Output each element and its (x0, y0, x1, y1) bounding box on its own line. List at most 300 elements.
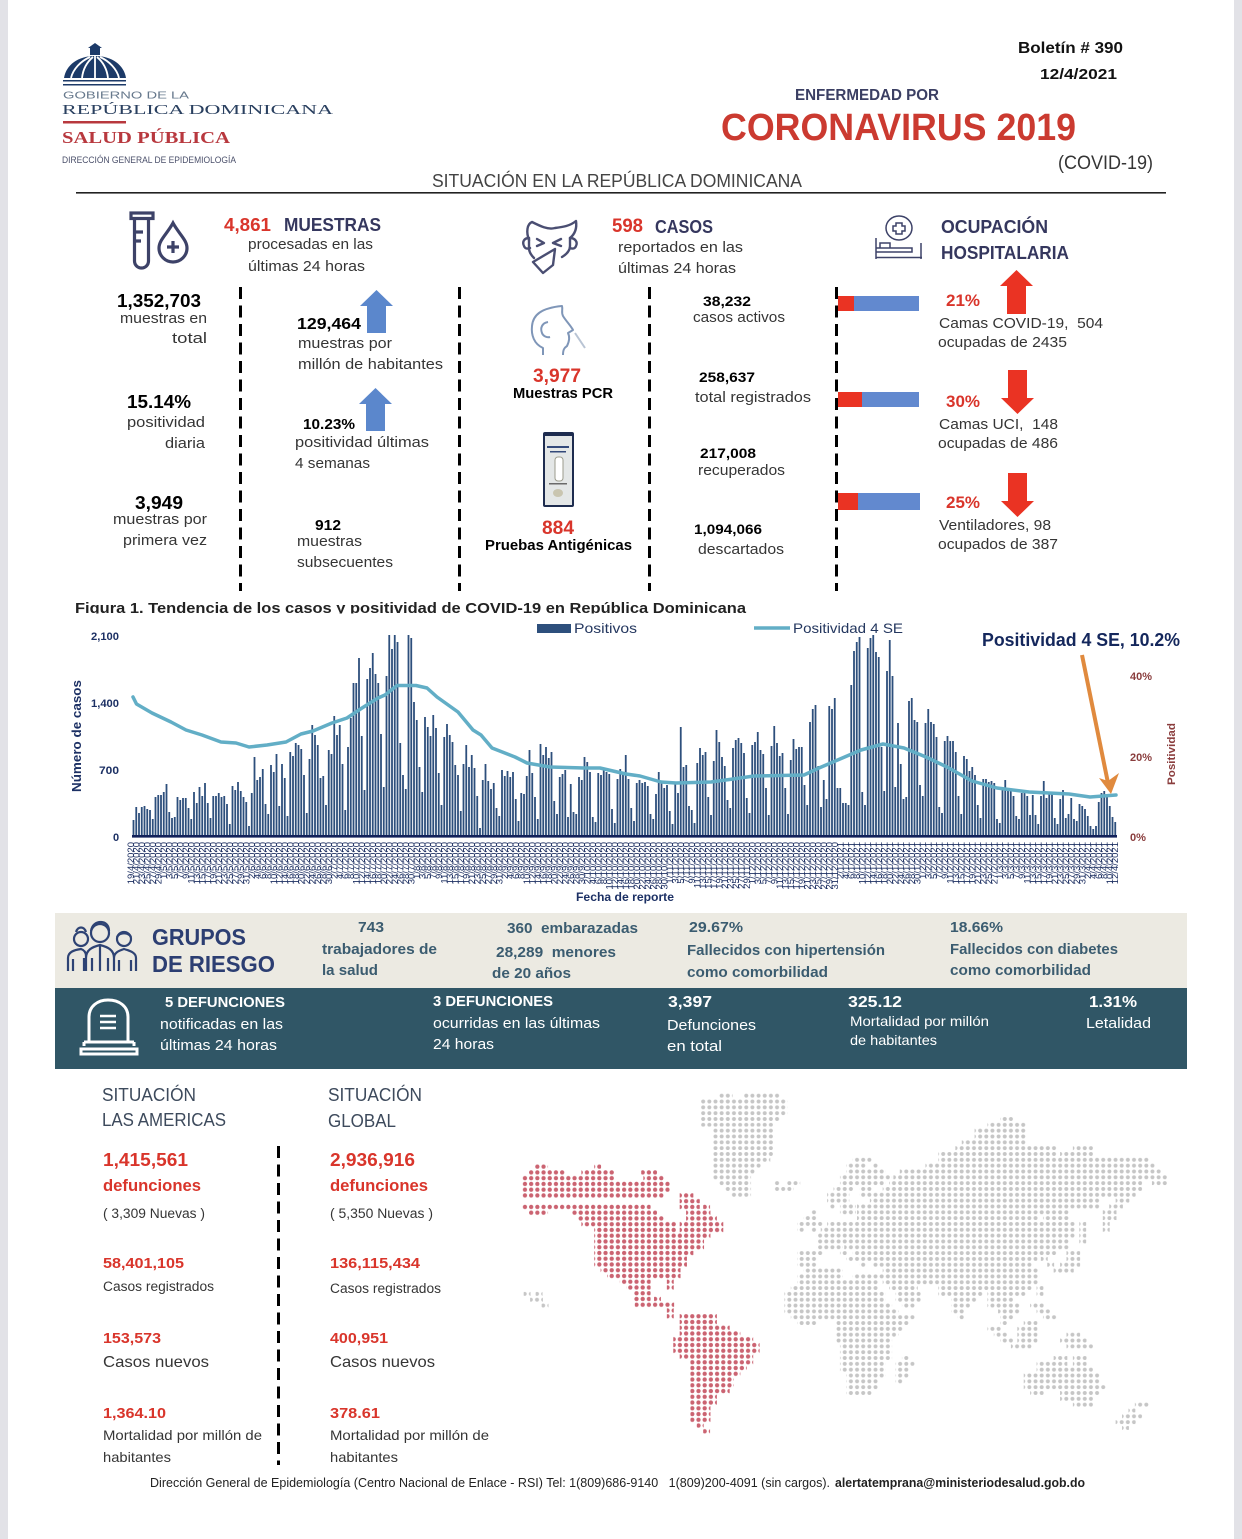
date axis labels: 9/11/2020 (687, 842, 698, 884)
date axis labels: 17/2/2021 (962, 842, 973, 884)
date axis labels: 11/11/2020 (692, 842, 704, 888)
panel: muestras: muestras en (120, 310, 207, 327)
panel: totales de casos: 258,637 (699, 369, 755, 385)
date axis labels: 5/12/2020 (758, 842, 770, 884)
date axis labels: 6/6/2020 (258, 842, 269, 879)
date axis labels: 22/6/2020 (302, 842, 313, 884)
panel: totales de casos: casos activos (693, 309, 785, 326)
text: embarazadas y menores: de 20 años (492, 965, 571, 982)
text: mortalidad por millón (848, 994, 989, 1048)
panel: muestras por millón y positividad: 129,464 (297, 316, 361, 333)
date axis labels: 9/2/2021 (940, 842, 951, 879)
date axis labels: 11/8/2020 (440, 842, 450, 884)
panel: situación global: SITUACIÓN (328, 1084, 422, 1105)
panel: situación global: defunciones (330, 1176, 428, 1195)
chart: camas COVID-19: ocupadas de 2435 (938, 334, 1067, 351)
date axis labels: 9/12/2020 (770, 842, 780, 884)
text: 5 defunciones: últimas 24 horas (160, 1037, 277, 1054)
date axis labels: 2/6/2020 (247, 842, 258, 879)
axis baseline (132, 835, 1117, 838)
date axis labels: 27/11/2020 (736, 842, 748, 889)
panel: muestras: primera vez (123, 532, 207, 549)
panel: situación global: ( 5,350 Nuevas ) (330, 1206, 433, 1221)
date axis labels: 25/11/2020 (731, 842, 742, 889)
date axis labels: 18/1/2021 (880, 842, 890, 884)
icon: hospital bed (876, 216, 922, 259)
panel: muestras: 4,861 (224, 215, 271, 235)
date axis labels: 27/3/2021 (1066, 842, 1078, 884)
date axis labels: 27/2/2021 (990, 842, 1000, 884)
chart: camas UCI: 30% (946, 392, 980, 411)
date axis labels: 17/5/2020 (203, 842, 214, 884)
date axis labels: 28/6/2020 (318, 842, 330, 884)
date axis labels: 13/2/2021 (951, 842, 962, 884)
date axis labels: 13/8/2020 (445, 842, 456, 884)
panel: totales de casos: recuperados (698, 462, 785, 479)
map: the Americas (525, 1167, 756, 1431)
date axis labels: 25/2/2021 (984, 842, 995, 884)
date axis labels: 31/5/2020 (242, 842, 252, 884)
text: defunciones en total (667, 994, 756, 1055)
date axis labels: 10/9/2020 (522, 842, 533, 884)
callout: positividad 4 SE, 10.2%: Positividad 4 SE, 10.2% (982, 630, 1180, 650)
panel: ocupación hospitalaria heading (941, 216, 1069, 263)
date axis labels: 6/4/2021 (1094, 842, 1105, 879)
date axis labels: 8/1/2021 (852, 842, 863, 879)
date axis labels: 2/7/2020 (330, 842, 340, 879)
date axis labels: 24/7/2020 (390, 842, 401, 884)
left axis labels: Número de casos (70, 680, 84, 792)
date axis labels: 18/7/2020 (374, 842, 384, 884)
date axis labels: 7/2/2021 (934, 842, 946, 879)
date axis labels: 5/8/2020 (423, 842, 434, 879)
date axis labels: 24/10/2020 (643, 842, 654, 890)
date axis labels: 29/3/2021 (1072, 842, 1083, 884)
date axis labels: 15/5/2020 (198, 842, 208, 884)
panel: muestras: diaria (165, 435, 206, 452)
date axis labels: 1/2/2021 (918, 842, 929, 879)
date axis labels: 3/11/2020 (670, 842, 682, 884)
date axis labels: 3/3/2021 (1000, 842, 1012, 879)
panel: situación las Américas: SITUACIÓN (102, 1084, 196, 1105)
date axis labels: 9/5/2020 (181, 842, 192, 879)
left axis labels (70, 631, 119, 844)
date axis labels: 21/11/2020 (720, 842, 731, 889)
text: hipertensión (687, 919, 885, 981)
date axis labels: 6/1/2021 (846, 842, 858, 879)
date axis labels: 17/8/2020 (456, 842, 467, 884)
figure title: Figura 1. Tendencia de los casos y positividad de COVID-19 en República Dominicana (75, 600, 747, 617)
line: positividad 4 SE (133, 686, 1116, 797)
date axis labels: 2/1/2021 (836, 842, 846, 879)
date axis labels: 30/10/2020 (660, 842, 670, 890)
text: trabajadores de la salud: 743 (358, 919, 384, 936)
date axis labels: 29/12/2020 (824, 842, 836, 890)
date axis labels: 19/12/2020 (797, 842, 808, 890)
date axis labels: 14/10/2020 (616, 842, 626, 890)
x axis title: Fecha de reporte (576, 890, 674, 904)
panel: grupos de riesgo: GRUPOS (152, 924, 246, 950)
text: trabajadores de la salud: la salud (322, 962, 378, 979)
date axis labels: 23/11/2020 (726, 842, 736, 889)
date axis labels: 21/12/2020 (802, 842, 814, 890)
logo: Gobierno de la República Dominicana (62, 43, 334, 166)
date axis labels: 21/3/2021 (1050, 842, 1061, 884)
text: trabajadores de la salud: trabajadores de (322, 941, 437, 958)
date axis labels: 1/3/2021 (995, 842, 1006, 879)
panel: situación las Américas: 58,401,105 (103, 1255, 184, 1272)
date axis labels: 23/3/2021 (1056, 842, 1066, 884)
date axis labels: 21/8/2020 (467, 842, 478, 884)
chart: camas COVID-19: Camas COVID-19, 504 (939, 315, 1103, 332)
panel: situación las Américas: 153,573 (103, 1330, 161, 1347)
panel: situación las Américas: habitantes (103, 1449, 171, 1465)
date axis labels: 4/7/2020 (335, 842, 346, 879)
date axis labels: 12/9/2020 (528, 842, 538, 884)
icon: nasal swab (532, 306, 585, 355)
date axis labels: 16/6/2020 (286, 842, 296, 884)
date axis labels: 13/3/2021 (1028, 842, 1039, 884)
date axis labels: 22/1/2021 (890, 842, 902, 884)
chart: ventiladores: 25% (946, 493, 980, 512)
date axis labels: 25/4/2020 (142, 842, 154, 884)
panel: situación global: Mortalidad por millón de (330, 1427, 489, 1443)
date axis labels: 4/10/2020 (588, 842, 599, 884)
chart: camas UCI (838, 370, 1058, 452)
date axis labels: 23/8/2020 (472, 842, 484, 884)
date axis labels: 20/6/2020 (296, 842, 308, 884)
date axis labels: 5/3/2021 (1006, 842, 1017, 879)
date axis labels: 9/8/2020 (434, 842, 445, 879)
panel: situación las Américas: LAS AMERICAS (102, 1110, 226, 1130)
date axis labels: 14/1/2021 (868, 842, 880, 884)
date axis labels: 1/12/2020 (748, 842, 758, 884)
text: 3 defunciones: ocurridas en las últimas (433, 1015, 600, 1032)
panel: pruebas antigénicas: 884 (542, 518, 574, 539)
date axis labels: 23/2/2021 (978, 842, 990, 884)
panel: muestras: 15.14% (127, 392, 191, 412)
bulletin number and date (1018, 40, 1123, 83)
left axis labels: 700 (99, 765, 119, 777)
date axis labels: 7/11/2020 (682, 842, 692, 884)
date axis labels: 11/3/2021 (1022, 842, 1034, 884)
legend: Positividad 4 SE (793, 620, 903, 636)
logo: Gobierno de la República Dominicana: SALUD PÚBLICA (62, 128, 231, 147)
date axis labels: 27/4/2020 (148, 842, 159, 884)
date axis labels: 8/4/2021 (1100, 842, 1110, 879)
text: defunciones en total: Defunciones (667, 1017, 756, 1034)
panel: ocupación hospitalaria heading: HOSPITALARIA (941, 243, 1069, 263)
chart: camas COVID-19: 21% (946, 291, 980, 310)
date axis labels: 11/5/2020 (186, 842, 198, 884)
text: defunciones en total: en total (667, 1038, 722, 1055)
date axis labels: 19/8/2020 (462, 842, 472, 884)
panel: muestras (113, 215, 381, 549)
icon: people (68, 922, 136, 971)
date axis labels: 18/6/2020 (291, 842, 302, 884)
date axis labels: 6/7/2020 (340, 842, 352, 879)
date axis labels: 15/8/2020 (450, 842, 462, 884)
date axis labels: 2/10/2020 (582, 842, 594, 884)
left axis labels: 1,400 (91, 698, 119, 710)
text: diabetes (950, 919, 1118, 979)
date axis labels: 12/6/2020 (274, 842, 286, 884)
date axis labels: 22/9/2020 (555, 842, 566, 884)
date axis labels: 23/5/2020 (220, 842, 230, 884)
date axis labels: 30/7/2020 (406, 842, 418, 884)
date axis labels: 29/5/2020 (236, 842, 247, 884)
bars: positivos (134, 635, 1115, 835)
date axis labels: 27/5/2020 (230, 842, 242, 884)
map: rest of the world (527, 1096, 1164, 1428)
date axis labels: 29/4/2020 (154, 842, 164, 884)
date axis labels: 8/9/2020 (516, 842, 528, 879)
icon: face with mask (523, 221, 577, 273)
logo: Gobierno de la República Dominicana: GOBIERNO DE LA (63, 90, 189, 102)
panel: casos: reportados en las (618, 239, 743, 256)
date axis labels: 21/4/2020 (132, 842, 142, 884)
date axis labels: 11/12/2020 (775, 842, 786, 889)
date axis labels: 5/2/2021 (929, 842, 940, 879)
panel: casos: CASOS (655, 217, 713, 237)
footer: alertatemprana@ministeriodesalud.gob.do (835, 1476, 1085, 1490)
panel: muestras: últimas 24 horas (248, 258, 365, 275)
right axis labels (1130, 671, 1178, 844)
date axis labels: 8/7/2020 (346, 842, 357, 879)
date axis labels: 3/5/2020 (164, 842, 176, 879)
panel: muestras PCR: 3,977 (533, 366, 581, 387)
panel: situación global: 136,115,434 (330, 1255, 421, 1272)
chart: ventiladores: Ventiladores, 98 (939, 517, 1051, 534)
date axis labels: 22/10/2020 (638, 842, 648, 890)
text: mortalidad por millón: de habitantes (850, 1032, 937, 1048)
panel: ocupación hospitalaria heading: OCUPACIÓN (941, 216, 1048, 237)
logo: Gobierno de la República Dominicana: DIRECCIÓN GENERAL DE EPIDEMIOLOGÍA (62, 155, 237, 166)
date axis labels: 20/1/2021 (885, 842, 896, 884)
panel: muestras por millón y positividad: muestras (297, 533, 362, 550)
text: diabetes: 18.66% (950, 919, 1003, 936)
date axis labels: 17/11/2020 (709, 842, 720, 889)
date axis labels: 1/8/2020 (412, 842, 423, 879)
date axis labels: 15/11/2020 (704, 842, 714, 889)
date axis labels: 28/7/2020 (401, 842, 412, 884)
date axis labels: 16/7/2020 (368, 842, 379, 884)
text: diabetes: como comorbilidad (950, 962, 1091, 979)
text: 3 defunciones (433, 993, 600, 1053)
date axis labels: 4/6/2020 (252, 842, 264, 879)
date axis labels: 27/12/2020 (819, 842, 830, 890)
date axis labels: 19/5/2020 (208, 842, 220, 884)
date axis labels: 5/11/2020 (676, 842, 687, 884)
panel: defunciones (55, 988, 1187, 1069)
date axis labels: 21/2/2021 (973, 842, 984, 884)
date axis labels: 31/12/2020 (830, 842, 841, 890)
date axis labels: 23/12/2020 (808, 842, 819, 890)
date axis labels: 3/8/2020 (418, 842, 428, 879)
text: 5 defunciones: notificadas en las (160, 1016, 283, 1033)
panel: totales de casos: descartados (698, 541, 784, 558)
title: CORONAVIRUS 2019 (721, 107, 1076, 149)
date axis labels: 28/1/2021 (907, 842, 918, 884)
panel: grupos de riesgo (55, 913, 1187, 988)
legend (537, 620, 903, 636)
panel: situación las Américas: defunciones (103, 1176, 201, 1195)
date axis labels: 12/10/2020 (610, 842, 621, 890)
date axis labels: 26/7/2020 (396, 842, 406, 884)
date axis labels: 6/10/2020 (594, 842, 604, 884)
date axis labels: 26/1/2021 (902, 842, 912, 884)
panel: muestras por millón y positividad: 4 semanas (295, 455, 370, 472)
date axis labels: 30/9/2020 (577, 842, 588, 884)
date axis labels: 24/9/2020 (560, 842, 572, 884)
date axis labels: 2/9/2020 (500, 842, 511, 879)
panel: muestras por millón y positividad: positividad últimas (295, 434, 429, 451)
right axis labels: Positividad (1166, 723, 1178, 785)
date axis labels: 26/9/2020 (566, 842, 577, 884)
panel: muestras por millón y positividad: 912 (315, 517, 341, 534)
panel: situación global: Casos registrados (330, 1281, 441, 1296)
text: letalidad: 1.31% (1089, 994, 1137, 1011)
date axis labels: 29/11/2020 (742, 842, 753, 889)
date axis labels: 17/3/2021 (1039, 842, 1050, 884)
panel: situación las Américas: Mortalidad por millón de (103, 1427, 262, 1443)
icon: antigen test kit (543, 432, 574, 507)
date axis labels: 10/10/2020 (604, 842, 616, 890)
panel: totales de casos: 38,232 (703, 293, 751, 309)
panel: situación global (328, 1084, 489, 1465)
date axis labels: 22/7/2020 (384, 842, 396, 884)
date axis labels: 24/6/2020 (308, 842, 318, 884)
date axis labels: 24/1/2021 (896, 842, 907, 884)
date axis labels: 15/12/2020 (786, 842, 797, 890)
chart: ventiladores: ocupados de 387 (938, 536, 1058, 553)
text: embarazadas y menores (492, 920, 638, 982)
text: defunciones en total: 3,397 (668, 994, 712, 1011)
date axis labels: 25/3/2021 (1061, 842, 1072, 884)
date axis labels: 1/5/2020 (159, 842, 170, 879)
panel: situación global: 378.61 (330, 1405, 380, 1422)
date axis labels: 27/8/2020 (484, 842, 494, 884)
left axis labels: 0 (113, 832, 119, 844)
logo: Gobierno de la República Dominicana: REPÚBLICA DOMINICANA (62, 101, 334, 118)
date axis labels: 4/9/2020 (506, 842, 516, 879)
right axis labels: 0% (1130, 832, 1146, 844)
date axis labels: 10/1/2021 (858, 842, 868, 884)
title: ENFERMEDAD POR (795, 87, 939, 104)
panel: muestras PCR: Muestras PCR (513, 385, 613, 402)
date axis labels: 21/5/2020 (214, 842, 225, 884)
date axis labels: 7/3/2021 (1012, 842, 1022, 879)
date axis labels: 14/9/2020 (533, 842, 544, 884)
date axis labels: 10/4/2021 (1105, 842, 1116, 884)
date axis labels: 3/2/2021 (924, 842, 934, 879)
text: letalidad: Letalidad (1086, 1015, 1151, 1032)
date axis labels: 4/1/2021 (841, 842, 852, 879)
date axis labels: 25/8/2020 (478, 842, 489, 884)
date axis labels: 8/6/2020 (264, 842, 274, 879)
panel: totales de casos: total registrados (695, 389, 811, 406)
date axis labels: 5/5/2020 (170, 842, 181, 879)
text: letalidad (1086, 994, 1151, 1032)
panel: muestras PCR (513, 366, 613, 402)
text: embarazadas y menores: 28,289 menores (496, 944, 616, 961)
date axis labels: 4/4/2021 (1088, 842, 1100, 879)
panel: grupos de riesgo: DE RIESGO (152, 951, 275, 977)
title: (COVID-19) (1058, 153, 1153, 174)
panel: muestras: total (172, 330, 207, 347)
panel: muestras: 1,352,703 (117, 291, 201, 311)
date axis labels: 7/12/2020 (764, 842, 775, 884)
date axis labels: 3/12/2020 (753, 842, 764, 884)
text: 5 defunciones (160, 994, 285, 1054)
icon: tombstone (81, 1000, 137, 1054)
panel: muestras por millón y positividad (295, 290, 443, 571)
text: mortalidad por millón: 325.12 (848, 994, 902, 1011)
panel: situación global: habitantes (330, 1449, 398, 1465)
date axis labels: 29/8/2020 (489, 842, 500, 884)
date axis labels: 12/4/2021 (1110, 842, 1121, 884)
date axis labels: 15/3/2021 (1034, 842, 1044, 884)
left axis labels: 2,100 (91, 631, 119, 643)
date axis labels: 20/7/2020 (379, 842, 390, 884)
date axis labels: 30/6/2020 (324, 842, 335, 884)
date axis labels: 25/5/2020 (225, 842, 236, 884)
panel: casos (612, 216, 743, 277)
text: trabajadores de la salud (322, 919, 437, 979)
date axis labels: 17/12/2020 (792, 842, 802, 890)
date axis labels: 11/2/2021 (946, 842, 956, 884)
date axis labels: 13/12/2020 (780, 842, 792, 890)
chart: camas UCI: ocupadas de 486 (938, 435, 1058, 452)
date axis labels: 14/6/2020 (280, 842, 291, 884)
footer: Dirección General de Epidemiología (Centro Nacional de Enlace - RSI) Tel: 1(809)686-9140 1(809)200-4091 (sin cargos). (150, 1476, 830, 1490)
date axis labels: 19/2/2021 (968, 842, 978, 884)
date axis labels: 19/11/2020 (714, 842, 726, 889)
title: SITUACIÓN EN LA REPÚBLICA DOMINICANA (432, 170, 802, 191)
date axis labels: 31/8/2020 (494, 842, 506, 884)
date axis labels: 26/6/2020 (313, 842, 324, 884)
date axis labels: 18/9/2020 (544, 842, 555, 884)
date axis labels: 16/9/2020 (538, 842, 550, 884)
icon: test tube and blood drop (131, 213, 187, 268)
date axis labels: 14/7/2020 (362, 842, 374, 884)
date axis labels: 2/4/2021 (1083, 842, 1094, 879)
panel: muestras por millón y positividad: 10.23% (303, 416, 355, 433)
panel: pruebas antigénicas: Pruebas Antigénicas (485, 537, 632, 554)
date axis labels: 25/12/2020 (814, 842, 824, 890)
chart: camas UCI: Camas UCI, 148 (939, 416, 1058, 433)
panel: totales de casos: 217,008 (700, 445, 756, 461)
date axis labels: 20/10/2020 (632, 842, 643, 890)
date axis labels: 31/3/2021 (1078, 842, 1088, 884)
date axis labels: 16/1/2021 (874, 842, 885, 884)
text: diabetes: Fallecidos con diabetes (950, 941, 1118, 958)
date axis labels (126, 842, 1121, 890)
panel: situación las Américas: 1,364.10 (103, 1405, 166, 1422)
column dividers (240, 287, 836, 591)
date axis labels: 23/4/2020 (137, 842, 148, 884)
text: hipertensión: como comorbilidad (687, 964, 828, 981)
text: 5 defunciones: 5 DEFUNCIONES (165, 994, 285, 1011)
date axis labels: 26/10/2020 (648, 842, 660, 890)
date axis labels: 12/1/2021 (863, 842, 874, 884)
right axis labels: 40% (1130, 671, 1152, 683)
panel: muestras: muestras por (113, 511, 207, 528)
date axis labels: 28/9/2020 (572, 842, 582, 884)
text: hipertensión: Fallecidos con hipertensión (687, 942, 885, 959)
date axis labels: 9/3/2021 (1017, 842, 1028, 879)
text: embarazadas y menores: 360 embarazadas (507, 920, 638, 937)
